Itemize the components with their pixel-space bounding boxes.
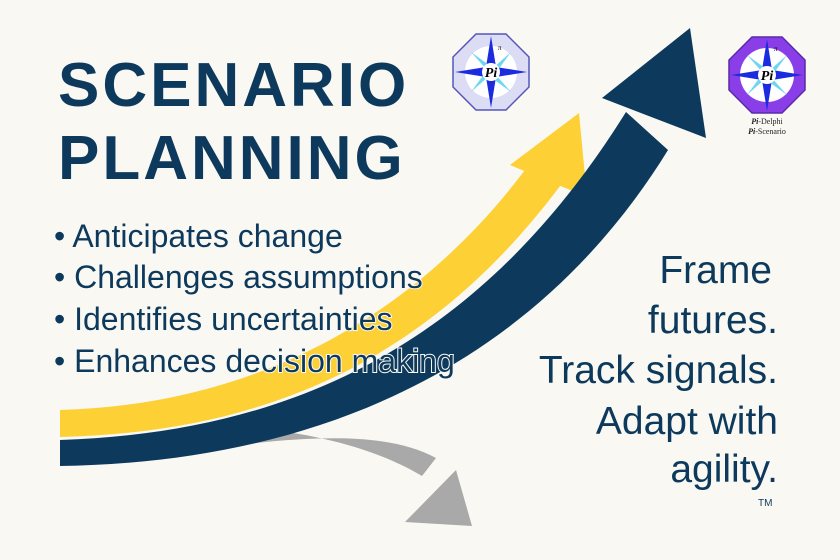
trademark: TM — [758, 498, 772, 509]
tagline: Adapt with — [596, 400, 778, 443]
logo caption: Pi-Scenario — [748, 127, 786, 136]
logo caption: Pi-Delphi — [751, 117, 784, 126]
title: SCENARIO — [58, 51, 409, 120]
logo left: Pi — [485, 66, 497, 81]
tagline: Frame — [659, 249, 772, 292]
logo right — [729, 37, 805, 113]
tagline: agility. — [670, 448, 778, 491]
bullet list: • Identifies uncertainties — [54, 301, 392, 337]
tagline: futures. — [648, 299, 778, 342]
bullet list: • Enhances decision making — [54, 343, 455, 379]
logo caption — [748, 117, 786, 136]
title: PLANNING — [58, 124, 406, 193]
logo left — [453, 34, 529, 110]
yellow arrow — [60, 113, 587, 437]
tagline — [539, 249, 778, 491]
navy arrow — [60, 28, 706, 466]
bullet list — [54, 218, 455, 379]
tagline: Track signals. — [539, 349, 778, 392]
bullet list: • Anticipates change — [54, 218, 343, 254]
logo right: π — [774, 45, 778, 53]
bullet list: • Challenges assumptions — [54, 259, 423, 295]
logo right: Pi — [761, 69, 773, 84]
title — [58, 51, 409, 193]
logo left: π — [498, 44, 502, 52]
gray arrow — [200, 426, 472, 526]
